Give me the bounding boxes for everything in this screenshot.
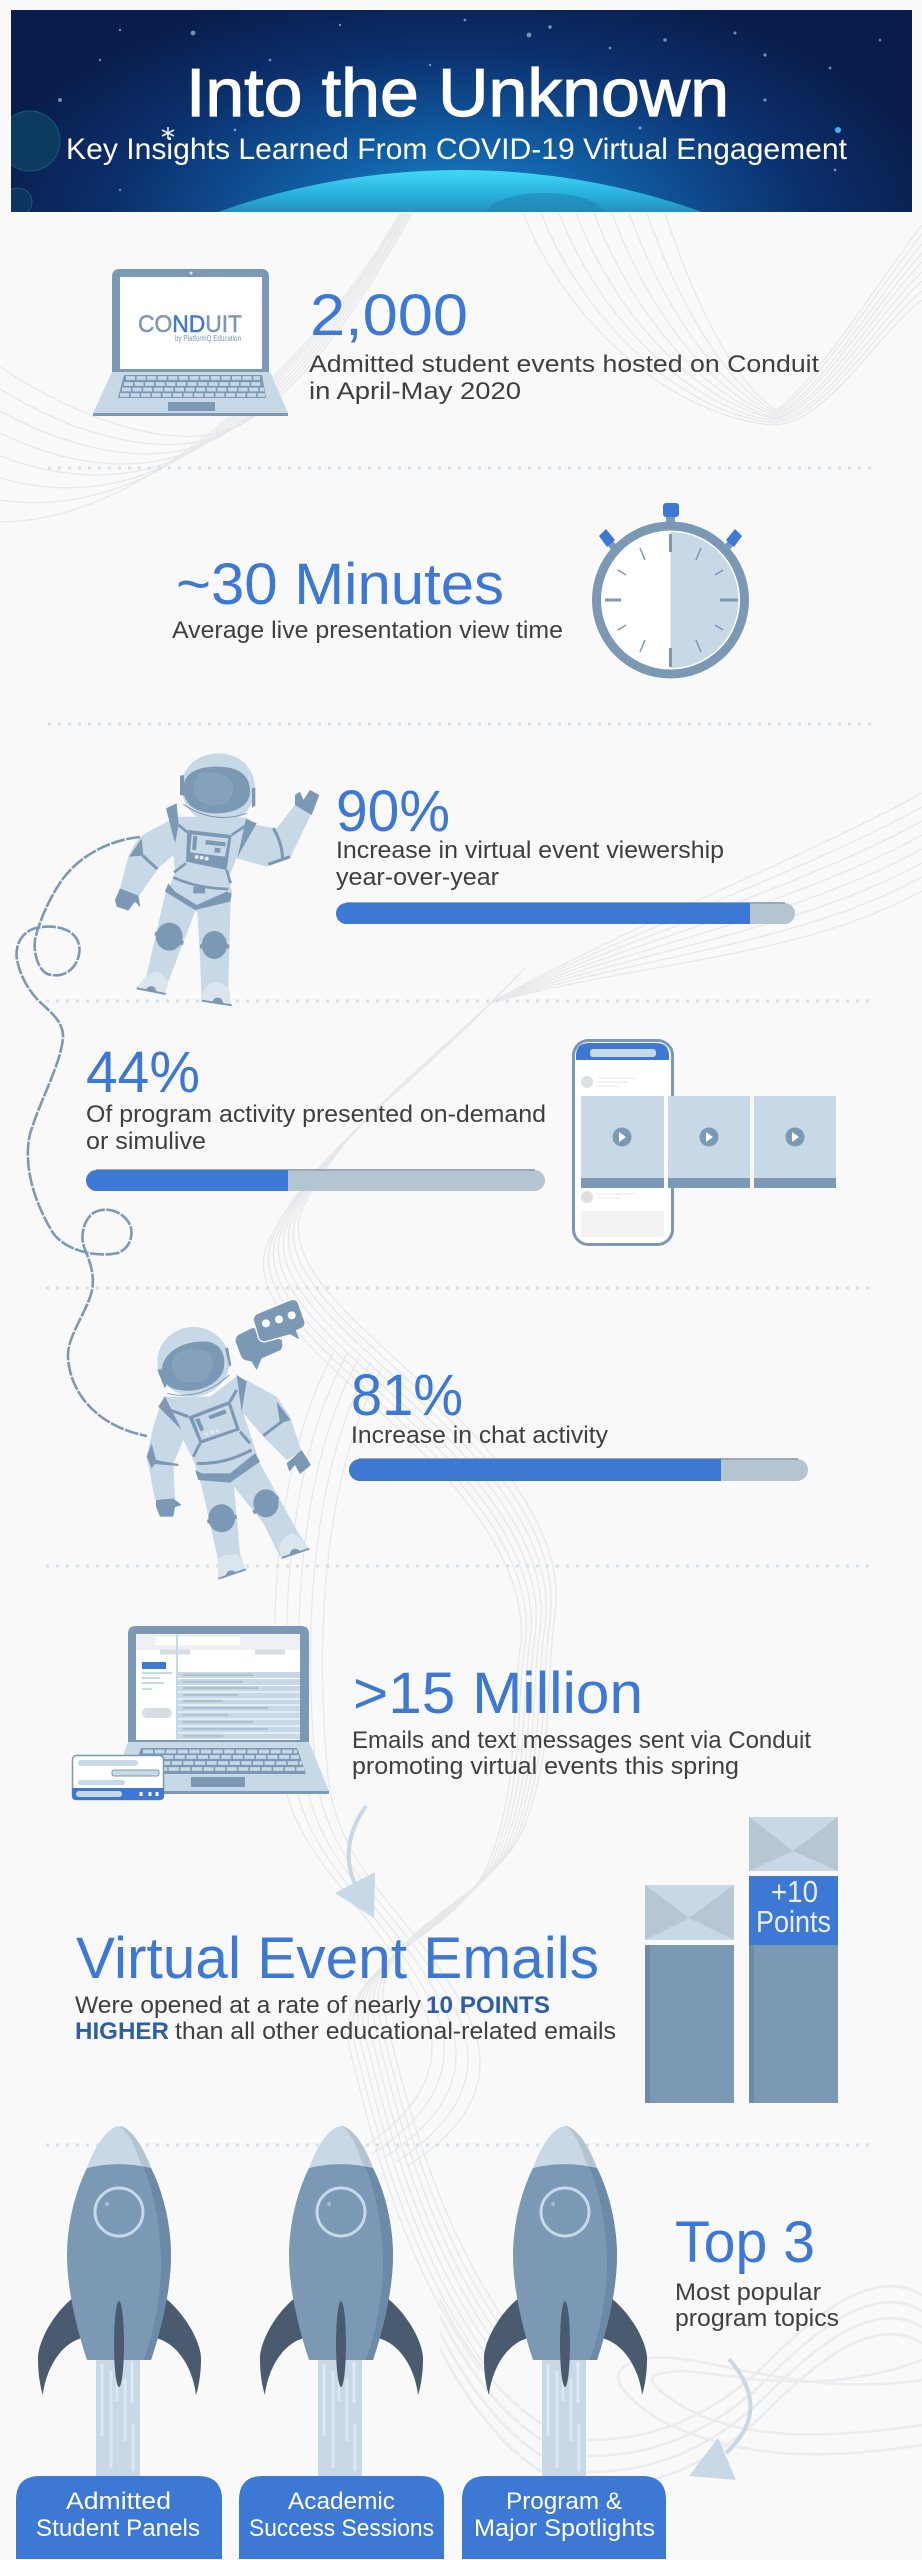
title: Into the Unknown [186, 55, 729, 131]
progress bar: 44% [86, 1170, 545, 1191]
label box: program and major spotlights: Major Spotlights [474, 2515, 655, 2542]
icon: rocket 3 [484, 2126, 647, 2477]
arrow: to virtual event emails [335, 1806, 375, 1918]
description: open rate [75, 1992, 616, 2045]
description: on-demand [86, 1101, 546, 1155]
icon: laptop with Conduit logo [93, 269, 288, 416]
icon: astronaut waving [115, 753, 319, 1005]
bar: virtual event emails [749, 1817, 838, 2103]
bar chart: email open rates [645, 1817, 838, 2103]
progress bar: 90% [336, 903, 795, 924]
label box: admitted student panels [16, 2476, 222, 2559]
stat: 2,000: 2,000 [310, 283, 468, 348]
subtitle: Key Insights Learned From COVID-19 Virtual Engagement [66, 133, 848, 166]
description: admitted student events [309, 351, 819, 405]
description: popular topics: program topics [675, 2305, 839, 2332]
description: emails and texts [352, 1727, 811, 1780]
label box: admitted student panels: Student Panels [36, 2515, 200, 2542]
description: emails and texts: Emails and text messages sent via Conduit [352, 1727, 811, 1754]
description: viewership [336, 837, 724, 891]
description: view time: Average live presentation view time [172, 617, 563, 644]
bar: virtual event emails: Points [756, 1904, 831, 1939]
description: admitted student events: in April-May 2020 [309, 378, 521, 405]
icon: chat bubbles [236, 1299, 305, 1370]
arrow: to program topics [689, 2359, 750, 2480]
description: on-demand: or simulive [86, 1128, 206, 1155]
section dividers [46, 468, 878, 2145]
description: admitted student events: Admitted student events hosted on Conduit [309, 351, 819, 378]
progress bar: 81% [349, 1459, 808, 1481]
stat: 15 million: >15 Million [353, 1661, 643, 1726]
heading: virtual event emails: Virtual Event Emails [76, 1926, 599, 1991]
icon: astronaut floating [147, 1327, 311, 1579]
stat: 30 minutes: ~30 Minutes [176, 552, 504, 617]
Conduit tagline: by PlatformQ Education [175, 334, 241, 343]
description: open rate: Were opened at a rate of nearly [75, 1992, 422, 2019]
astronaut tether [17, 837, 147, 1436]
description: open rate: 10 POINTS [426, 1992, 550, 2019]
stat: 44%: 44% [86, 1040, 200, 1105]
background thick waves lower right [440, 2286, 922, 2488]
stat: 81%: 81% [351, 1363, 463, 1428]
icon: phone with video tiles [574, 1040, 836, 1244]
icon: laptop with inbox and chat [72, 1626, 329, 1800]
icon: rocket 1 [38, 2126, 201, 2477]
description: open rate: than all other educational-related emails [175, 2018, 616, 2045]
icon: rocket 2 [260, 2126, 423, 2477]
description: chat activity: Increase in chat activity [351, 1422, 609, 1449]
bar: other emails [645, 1885, 734, 2103]
label box: academic success sessions: Academic [288, 2488, 395, 2515]
stat: 90%: 90% [336, 779, 450, 844]
description: emails and texts: promoting virtual events this spring [352, 1753, 739, 1780]
description: open rate: HIGHER [75, 2018, 169, 2045]
bar: virtual event emails: +10 [771, 1874, 818, 1909]
stat: top 3: Top 3 [675, 2210, 815, 2275]
description: popular topics [675, 2279, 839, 2332]
Conduit logo text: CONDUIT [138, 311, 242, 338]
header banner [11, 10, 912, 212]
label box: program and major spotlights: Program & [506, 2488, 622, 2515]
icon: stopwatch [596, 503, 744, 674]
description: viewership: year-over-year [336, 864, 499, 891]
description: popular topics: Most popular [675, 2279, 821, 2306]
label box: admitted student panels: Admitted [66, 2488, 171, 2515]
description: on-demand: Of program activity presented on-demand [86, 1101, 546, 1128]
label box: academic success sessions: Success Sessions [249, 2515, 434, 2542]
label box: academic success sessions [239, 2476, 444, 2559]
description: viewership: Increase in virtual event viewership [336, 837, 724, 864]
label box: program and major spotlights [462, 2476, 666, 2559]
